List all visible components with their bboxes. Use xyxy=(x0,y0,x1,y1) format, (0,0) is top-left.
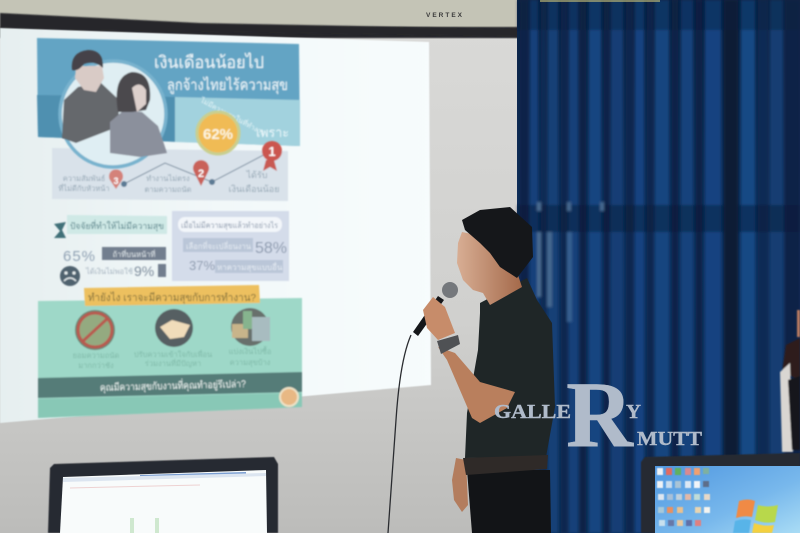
arm xyxy=(438,347,515,423)
62 percent badge: เพราะ xyxy=(256,125,289,140)
microphone cable xyxy=(388,335,411,533)
hair xyxy=(462,207,533,278)
rank 1 rosette: 1 xyxy=(268,144,276,159)
62 percent badge: ไม่มีความสุขในที่ทำงาน xyxy=(198,95,268,138)
consequences panel: 58% xyxy=(255,240,287,257)
trousers xyxy=(467,470,551,533)
infographic header panel xyxy=(37,38,300,146)
factors panel: ถ้าที่บนหน้าที่ xyxy=(113,249,155,259)
left laptop xyxy=(48,457,278,533)
solutions panel xyxy=(38,285,302,418)
solution captions: ปรับความเข้าใจกับเพื่อน xyxy=(134,349,212,359)
projector screen housing with brand xyxy=(0,0,538,38)
62 percent badge xyxy=(197,95,289,154)
presenter xyxy=(413,207,555,533)
closing question bar xyxy=(38,372,302,398)
solution captions: แบ่งเงินไปซื้อ xyxy=(229,346,271,356)
source footer and logo xyxy=(38,388,302,418)
desktop icons xyxy=(657,468,710,526)
watermark: R xyxy=(566,363,634,467)
slide title xyxy=(154,52,288,95)
reason labels: เงินเดือนน้อย xyxy=(229,184,279,194)
watermark: GALLE xyxy=(494,401,571,423)
rank 1 rosette xyxy=(262,141,282,171)
hand on microphone xyxy=(423,297,455,340)
solutions question banner xyxy=(84,285,260,306)
consequences panel: เมื่อไม่มีความสุขแล้วทำอย่างไร xyxy=(181,219,279,230)
lower hand xyxy=(452,458,468,512)
microphone xyxy=(413,282,458,336)
polo shirt xyxy=(465,278,555,458)
factors panel: 65% xyxy=(63,248,96,265)
reason labels xyxy=(58,170,279,194)
icon: shopping bags xyxy=(231,308,270,346)
icon: no overwork xyxy=(75,310,115,350)
factors panel: ปัจจัยที่ทำให้ไม่มีความสุข xyxy=(70,219,164,232)
curtain xyxy=(517,0,800,533)
reason labels: ทำงานไม่ตรง xyxy=(146,174,190,183)
consequences panel: 37% xyxy=(189,258,215,273)
closing question bar: คุณมีความสุขกับงานที่คุณทำอยู่รึเปล่า? xyxy=(100,376,246,394)
rank 3 pin xyxy=(109,169,123,189)
62 percent badge: 62% xyxy=(203,126,233,143)
factors panel: 9% xyxy=(134,263,154,279)
watermark: Y xyxy=(626,401,642,423)
rank 3 pin: 3 xyxy=(113,176,119,186)
reason labels: ที่ไม่ดีกับหัวหน้า xyxy=(58,183,110,193)
projector screen housing with brand: VERTEX xyxy=(426,12,463,19)
consequences panel: หาความสุขแบบอื่น xyxy=(217,261,283,272)
projected slide xyxy=(0,28,431,423)
reason labels: ตามความถนัด xyxy=(145,185,192,194)
factors panel xyxy=(54,215,167,286)
wall and projection screen xyxy=(0,0,530,533)
consequences panel: เลือกที่จะเปลี่ยนงาน xyxy=(186,240,252,251)
rank 2 pin: 2 xyxy=(198,168,204,180)
reason labels: ได้รับ xyxy=(246,170,268,180)
right laptop xyxy=(641,453,800,533)
rank 2 pin xyxy=(193,160,209,186)
solution captions: ร่วมงานที่มีปัญหา xyxy=(145,358,201,368)
watermark xyxy=(494,363,703,467)
factors panel: ได้เงินไม่พอใช้ xyxy=(85,267,133,276)
illustration: stressed couple xyxy=(60,50,167,167)
icon: windows logo xyxy=(733,500,778,533)
woman at right edge xyxy=(780,310,800,452)
consequences panel xyxy=(172,211,289,281)
slide title: เงินเดือนน้อยไป xyxy=(154,52,264,72)
solution captions: ยอมความถนัด xyxy=(73,351,120,360)
solution captions: มากกว่าชัง xyxy=(78,361,114,370)
wristwatch xyxy=(437,335,460,354)
solution captions xyxy=(73,346,271,370)
watermark: MUTT xyxy=(637,428,703,450)
solutions question banner: ทำยังไง เราจะมีความสุขกับการทำงาน? xyxy=(88,291,256,304)
icon: sad face xyxy=(60,266,80,286)
slide title: ลูกจ้างไทยไร้ความสุข xyxy=(167,76,288,95)
solution captions: ความสุขบ้าง xyxy=(230,358,271,367)
reasons strip xyxy=(52,141,288,201)
belt xyxy=(463,455,548,475)
head and neck xyxy=(457,232,522,305)
reason labels: ความสัมพันธ์ xyxy=(63,174,105,183)
icon: handshake xyxy=(155,309,193,347)
